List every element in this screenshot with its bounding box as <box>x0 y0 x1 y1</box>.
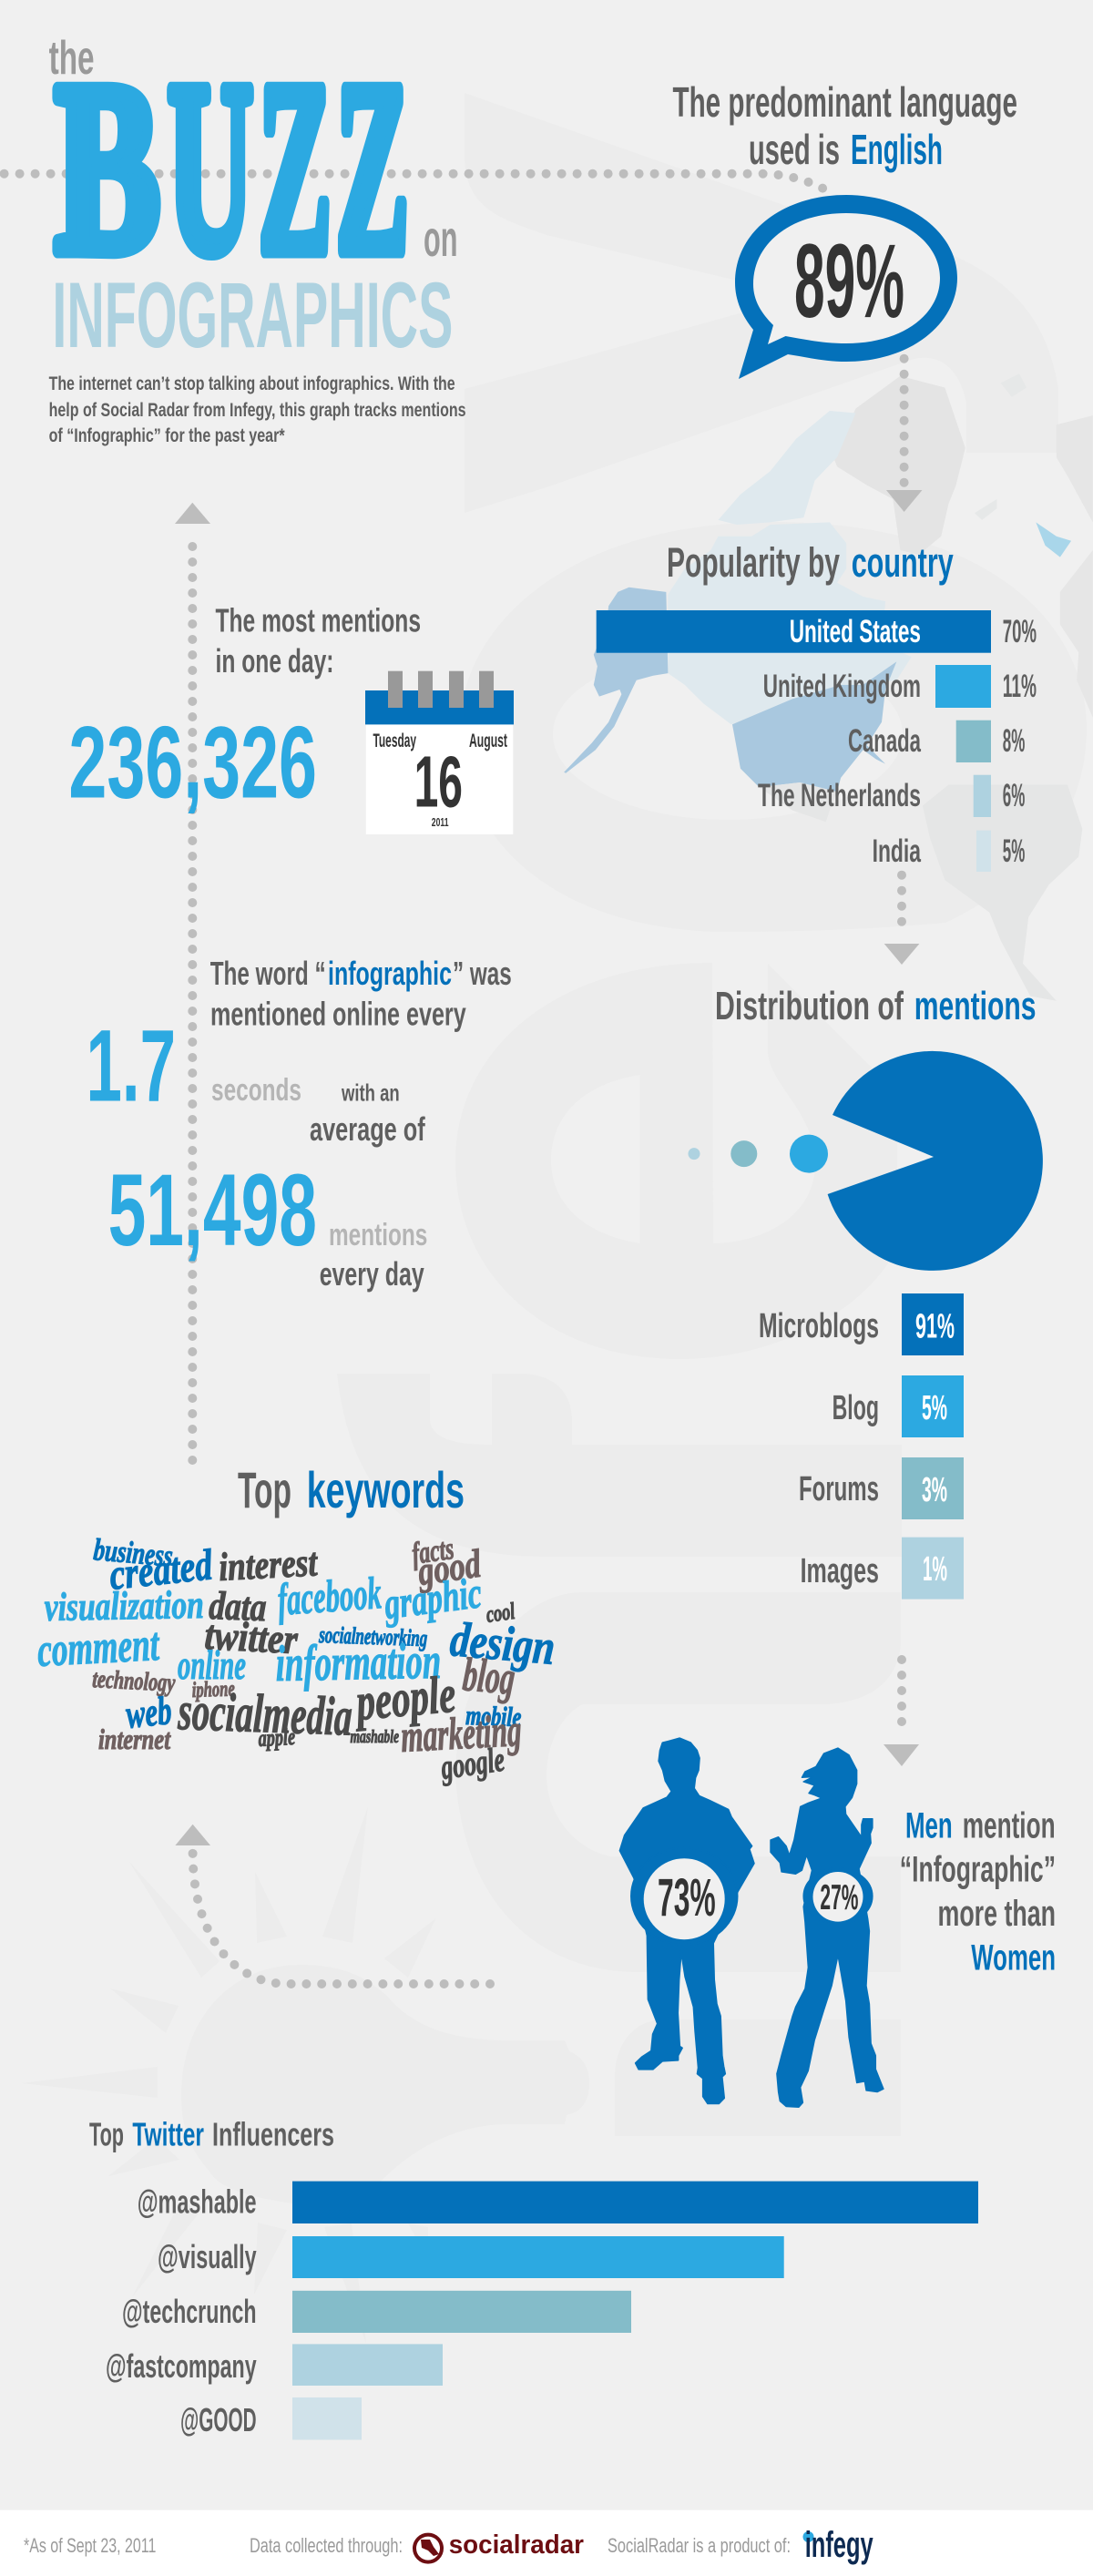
speech bubble: 89%: 89% <box>794 223 904 340</box>
row: GOOD: @GOOD <box>180 2401 257 2438</box>
word cloud: online <box>178 1641 246 1688</box>
silhouette: woman 27% <box>771 1748 884 2107</box>
row: fastcompany <box>106 2344 443 2386</box>
dotted arrow: distribution to gender <box>884 1660 919 1766</box>
calendar icon: 2011 <box>432 815 448 829</box>
word cloud: design <box>448 1611 557 1675</box>
row: Blog <box>833 1375 964 1437</box>
word cloud: graphic <box>381 1569 485 1629</box>
word cloud: iphone <box>191 1677 235 1702</box>
word cloud: twitter <box>203 1611 300 1662</box>
heading: popularity by country: country <box>852 539 954 586</box>
word cloud: apple <box>258 1723 296 1752</box>
row: Forums: Forums <box>799 1470 879 1508</box>
dotted arrow: bubble to country chart <box>886 359 922 512</box>
word mentioned text <box>210 955 512 1032</box>
most mentions text: The most mentions <box>215 601 421 639</box>
pie chart: pacman <box>689 1051 1043 1271</box>
bar chart: country: 6% <box>1003 778 1025 813</box>
heading: top keywords: keywords <box>307 1461 465 1518</box>
word mentioned text: ” was <box>453 955 512 992</box>
gender text <box>900 1806 1056 1978</box>
row: Microblogs: Microblogs <box>759 1307 879 1345</box>
most mentions text <box>215 601 421 680</box>
calendar icon: August <box>469 731 507 751</box>
number: 1.7 seconds: 1.7 <box>86 1009 176 1123</box>
world map <box>564 373 1093 1001</box>
heading: top twitter influencers <box>89 2116 334 2153</box>
row: Images: Images <box>801 1552 879 1590</box>
intro paragraph: The internet can’t stop talking about infographics. With the <box>49 373 455 394</box>
row: Canada: Canada <box>848 723 921 759</box>
row: Forums <box>799 1457 964 1519</box>
number: 236,326: 236,326 <box>68 705 317 820</box>
title: BUZZ: B <box>55 32 160 304</box>
arrow: left column up <box>175 503 210 524</box>
row: United Kingdom: United Kingdom <box>763 669 921 704</box>
row: techcrunch <box>122 2291 631 2333</box>
title block: Z <box>336 32 409 304</box>
calendar icon: Tuesday <box>373 731 416 751</box>
word cloud: socialmedia <box>177 1681 353 1747</box>
heading: top twitter influencers: Top <box>89 2116 124 2153</box>
word cloud: facebook <box>276 1567 383 1625</box>
row: Canada <box>848 721 1025 762</box>
title: BUZZ: Z <box>259 32 332 304</box>
row: United States <box>597 610 1037 653</box>
row: The Netherlands: The Netherlands <box>758 778 921 813</box>
word cloud: technology <box>92 1665 177 1698</box>
heading: distribution of mentions: mentions <box>914 984 1037 1028</box>
row: United States: United States <box>790 614 921 649</box>
word cloud <box>36 1532 557 1787</box>
row: GOOD <box>180 2397 362 2439</box>
word cloud: good <box>414 1541 484 1594</box>
row: India <box>873 831 1025 872</box>
bar chart: twitter influencers <box>106 2182 978 2439</box>
word cloud: internet <box>98 1722 171 1755</box>
word cloud: google <box>438 1741 507 1787</box>
logo: infegy: infegy <box>805 2525 873 2565</box>
number: 51,498 mentions: every day <box>320 1255 424 1293</box>
logo: infegy <box>803 2525 873 2565</box>
bar chart: country <box>597 610 1037 872</box>
word cloud: interest <box>218 1539 320 1590</box>
heading: top twitter influencers: Twitter <box>132 2116 204 2153</box>
row: United Kingdom: 11% <box>1003 669 1037 704</box>
title: on: on <box>424 210 457 267</box>
average of text: average of <box>310 1110 425 1148</box>
language heading: English <box>851 126 943 173</box>
row: United States: 70% <box>1003 614 1037 649</box>
gender text: Men <box>905 1806 953 1846</box>
calendar icon <box>365 671 514 834</box>
number: 1.7 seconds: seconds <box>211 1073 301 1108</box>
word cloud: business <box>92 1533 174 1574</box>
average of text: with an <box>341 1079 400 1107</box>
row: Microblogs: 91% <box>915 1308 955 1346</box>
heading: top twitter influencers: Influencers <box>212 2116 334 2153</box>
bar chart: country: 5% <box>1003 833 1025 869</box>
row: Forums: 3% <box>922 1471 947 1509</box>
dotted connector: title to speech bubble <box>5 174 834 195</box>
dotted arrow: gender to keywords <box>175 1825 490 1984</box>
number: 51,498 mentions: mentions <box>329 1218 427 1252</box>
row: mashable <box>138 2182 978 2223</box>
dotted arrow: country to distribution <box>884 875 919 965</box>
word cloud: marketing <box>400 1704 523 1762</box>
row: India: India <box>873 833 921 869</box>
row: Images: 1% <box>923 1550 947 1589</box>
silhouette: man 73% <box>620 1738 754 2103</box>
row: fastcompany: @fastcompany <box>106 2347 257 2385</box>
word cloud: people <box>351 1664 458 1732</box>
intro paragraph: of “Infographic” for the past year* <box>49 425 285 446</box>
title block <box>49 32 466 446</box>
row: techcrunch: @techcrunch <box>122 2293 257 2330</box>
row: visually: @visually <box>158 2238 257 2275</box>
silhouette: woman 27%: 27% <box>820 1878 858 1917</box>
speech bubble: 89% <box>735 195 957 379</box>
word cloud: web <box>124 1688 174 1737</box>
silhouette: man 73%: 73% <box>658 1868 716 1927</box>
row: Images <box>801 1538 964 1600</box>
word mentioned text: infographic <box>328 955 452 992</box>
word cloud: facts <box>410 1532 456 1571</box>
word cloud: comment <box>36 1619 161 1677</box>
word cloud: data <box>209 1583 267 1630</box>
word cloud: visualization <box>44 1582 204 1630</box>
data credit: Data collected through: <box>250 2534 403 2557</box>
word cloud: socialnetworking <box>318 1621 428 1651</box>
title: INFOGRAPHICS: INFOGRAPHICS <box>52 263 453 367</box>
row: Microblogs <box>759 1293 964 1355</box>
footer <box>0 2510 1093 2576</box>
product credit: SocialRadar is a product of: <box>608 2534 791 2557</box>
language heading: used is <box>749 126 840 173</box>
word cloud: blog <box>461 1649 517 1705</box>
row: Blog: 5% <box>922 1389 947 1427</box>
word cloud: mashable <box>350 1727 399 1747</box>
footnote: *As of Sept 23, 2011 <box>24 2534 156 2557</box>
heading: distribution of mentions: Distribution of <box>715 984 904 1028</box>
word cloud: mobile <box>465 1701 522 1733</box>
row: mashable: @mashable <box>138 2183 257 2221</box>
logo: socialradar: socialradar <box>449 2530 584 2560</box>
intro paragraph <box>49 373 466 446</box>
number: 51,498 mentions: 51,498 <box>108 1153 317 1267</box>
calendar icon: 16 <box>414 741 463 823</box>
title: BUZZ: U <box>168 32 253 304</box>
distribution legend <box>759 1293 964 1600</box>
heading: popularity by country: Popularity by <box>667 539 840 586</box>
intro paragraph: help of Social Radar from Infegy, this graph tracks mentions <box>49 400 466 421</box>
word mentioned text: The word “ <box>210 955 326 992</box>
word mentioned text: mentioned online every <box>210 995 466 1032</box>
heading: top keywords <box>238 1461 465 1518</box>
word cloud: created <box>107 1540 215 1600</box>
heading: top keywords: Top <box>238 1461 291 1518</box>
dotted connector: up along left column <box>188 532 197 1460</box>
number: 1.7 seconds <box>86 1009 301 1123</box>
row: visually <box>158 2236 784 2278</box>
title: the: the <box>49 32 95 85</box>
average of text <box>310 1079 425 1148</box>
word cloud: information <box>275 1633 442 1692</box>
most mentions text: in one day: <box>215 642 333 680</box>
row: Blog: Blog <box>833 1389 879 1427</box>
bar chart: country: 8% <box>1003 723 1025 759</box>
word cloud: cool <box>485 1598 517 1628</box>
language heading <box>672 78 1017 173</box>
